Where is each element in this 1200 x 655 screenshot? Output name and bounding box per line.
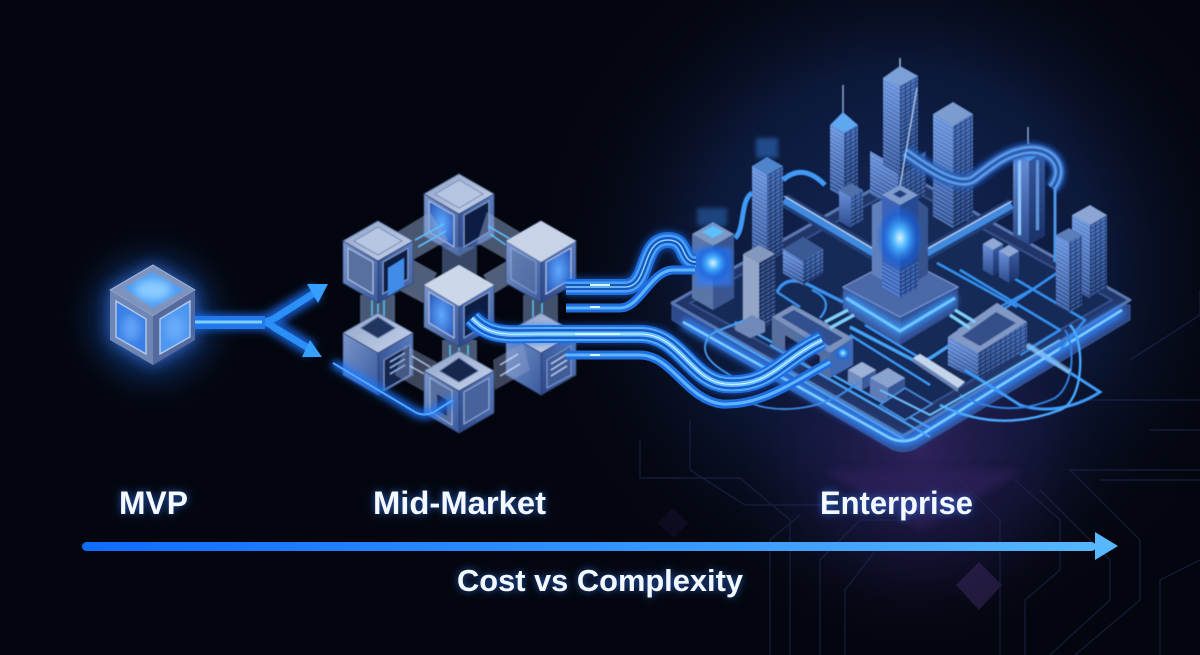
wire into bottom cube: [333, 363, 453, 414]
stage 2: mid-market cube network: [343, 174, 576, 433]
translucent connector bands: [360, 212, 558, 330]
lower right cube: [506, 313, 576, 395]
lower left cube: [343, 313, 413, 395]
central plinth and glowing tower: [843, 185, 958, 345]
back tower: [870, 58, 926, 210]
stage 3: enterprise city: [672, 58, 1130, 452]
elevated pipeline over towers: [900, 88, 1058, 262]
glowing left tower: [692, 208, 734, 310]
axis title: Cost vs Complexity: [457, 563, 744, 598]
far right spire tower: [1013, 127, 1045, 245]
right front towers: [1056, 205, 1107, 312]
upper left cube: [343, 221, 413, 303]
right back tower: [933, 102, 973, 228]
label: Mid-Market: Mid-Market: [373, 485, 546, 521]
upper right cube: [506, 221, 576, 303]
front bottom cube: [424, 351, 494, 433]
front right building: [948, 303, 1027, 380]
axis arrow: [82, 532, 1118, 560]
forked arrow from MVP to mid-market: [195, 284, 328, 357]
road network: [715, 196, 1085, 440]
label: MVP: MVP: [119, 485, 188, 521]
lower bands and pillar: [395, 340, 530, 395]
circuit traces background: [640, 290, 1200, 655]
small front blocks: [848, 362, 932, 420]
city neon pipelines: [705, 310, 1100, 421]
platform: [672, 172, 1130, 452]
front centre cube: [424, 265, 494, 347]
back cube: [424, 174, 494, 256]
left tower: [735, 138, 825, 262]
stage 1: MVP cube icon: [58, 223, 248, 413]
bridge building: [772, 305, 853, 378]
slim tower: [735, 245, 775, 338]
low block: [783, 237, 823, 285]
data pipelines between mid-market and enterprise: [472, 240, 830, 404]
left spire tower: [830, 85, 863, 228]
label: Enterprise: Enterprise: [820, 485, 973, 521]
train: [913, 354, 965, 392]
right mid small blocks: [983, 238, 1019, 283]
